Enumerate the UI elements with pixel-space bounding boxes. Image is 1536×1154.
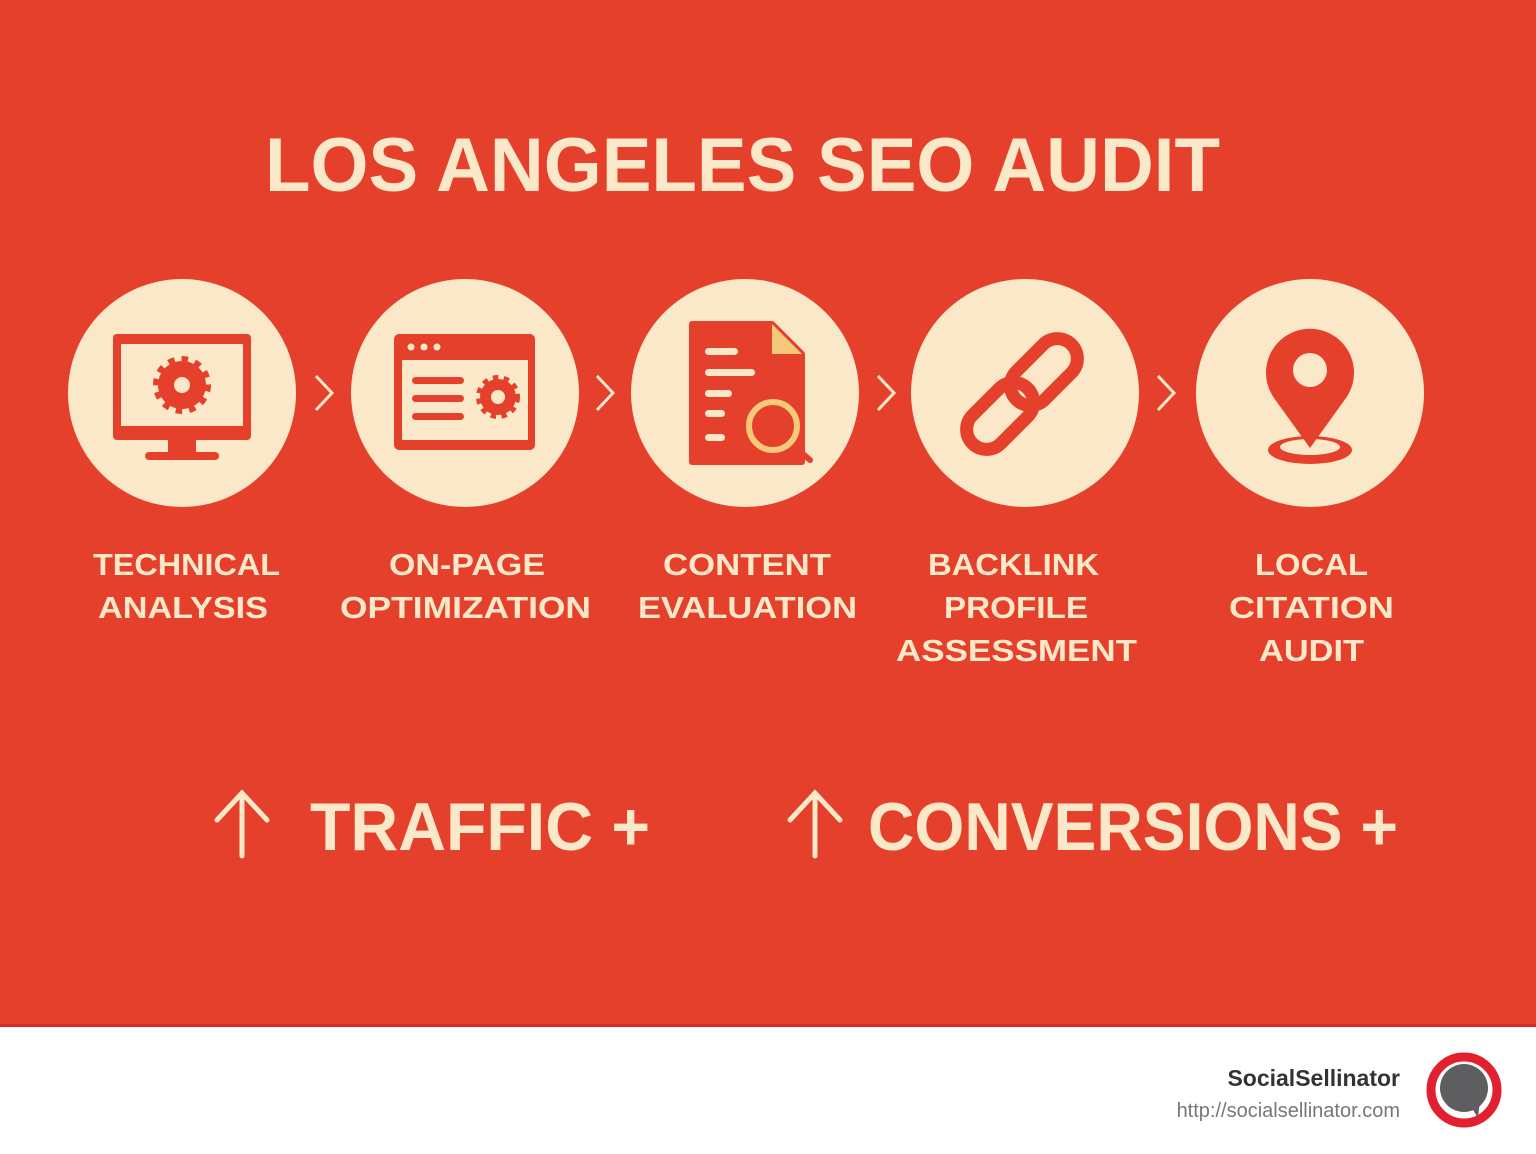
arrow	[878, 376, 894, 410]
label: ON-PAGE	[389, 547, 545, 582]
step 4: backlink profile assessment	[896, 279, 1139, 668]
arrow	[1158, 376, 1174, 410]
label: BACKLINK	[928, 547, 1100, 582]
icon: chain link	[911, 279, 1139, 507]
title: LOS ANGELES SEO AUDIT	[265, 123, 1220, 208]
label: CONTENT	[663, 547, 831, 582]
label: ASSESSMENT	[896, 633, 1137, 668]
footer brand: SocialSellinator	[1227, 1065, 1400, 1091]
arrow	[316, 376, 332, 410]
icon: browser with gear	[351, 279, 579, 507]
step 5: local citation audit	[1196, 279, 1424, 668]
icon: location pin	[1196, 279, 1424, 507]
icon: up arrow	[790, 793, 840, 856]
footer brand: http://socialsellinator.com	[1177, 1100, 1400, 1122]
footer brand	[1177, 1057, 1497, 1123]
icon: monitor with gear	[68, 279, 296, 507]
label: CITATION	[1229, 590, 1394, 625]
icon: document with magnifier	[631, 279, 859, 507]
icon: logo	[1431, 1057, 1497, 1123]
step 2: on-page optimization	[340, 279, 591, 625]
label: ANALYSIS	[98, 590, 268, 625]
label: AUDIT	[1259, 633, 1364, 668]
outcome: conversions: CONVERSIONS +	[868, 789, 1398, 865]
label: LOCAL	[1255, 547, 1368, 582]
label: EVALUATION	[638, 590, 857, 625]
label: OPTIMIZATION	[340, 590, 591, 625]
outcome: traffic: TRAFFIC +	[310, 789, 650, 865]
arrow	[597, 376, 613, 410]
step 1: technical analysis	[68, 279, 296, 625]
label: TECHNICAL	[93, 547, 280, 582]
icon: up arrow	[217, 793, 267, 856]
label: PROFILE	[944, 590, 1088, 625]
step 3: content evaluation	[631, 279, 859, 625]
